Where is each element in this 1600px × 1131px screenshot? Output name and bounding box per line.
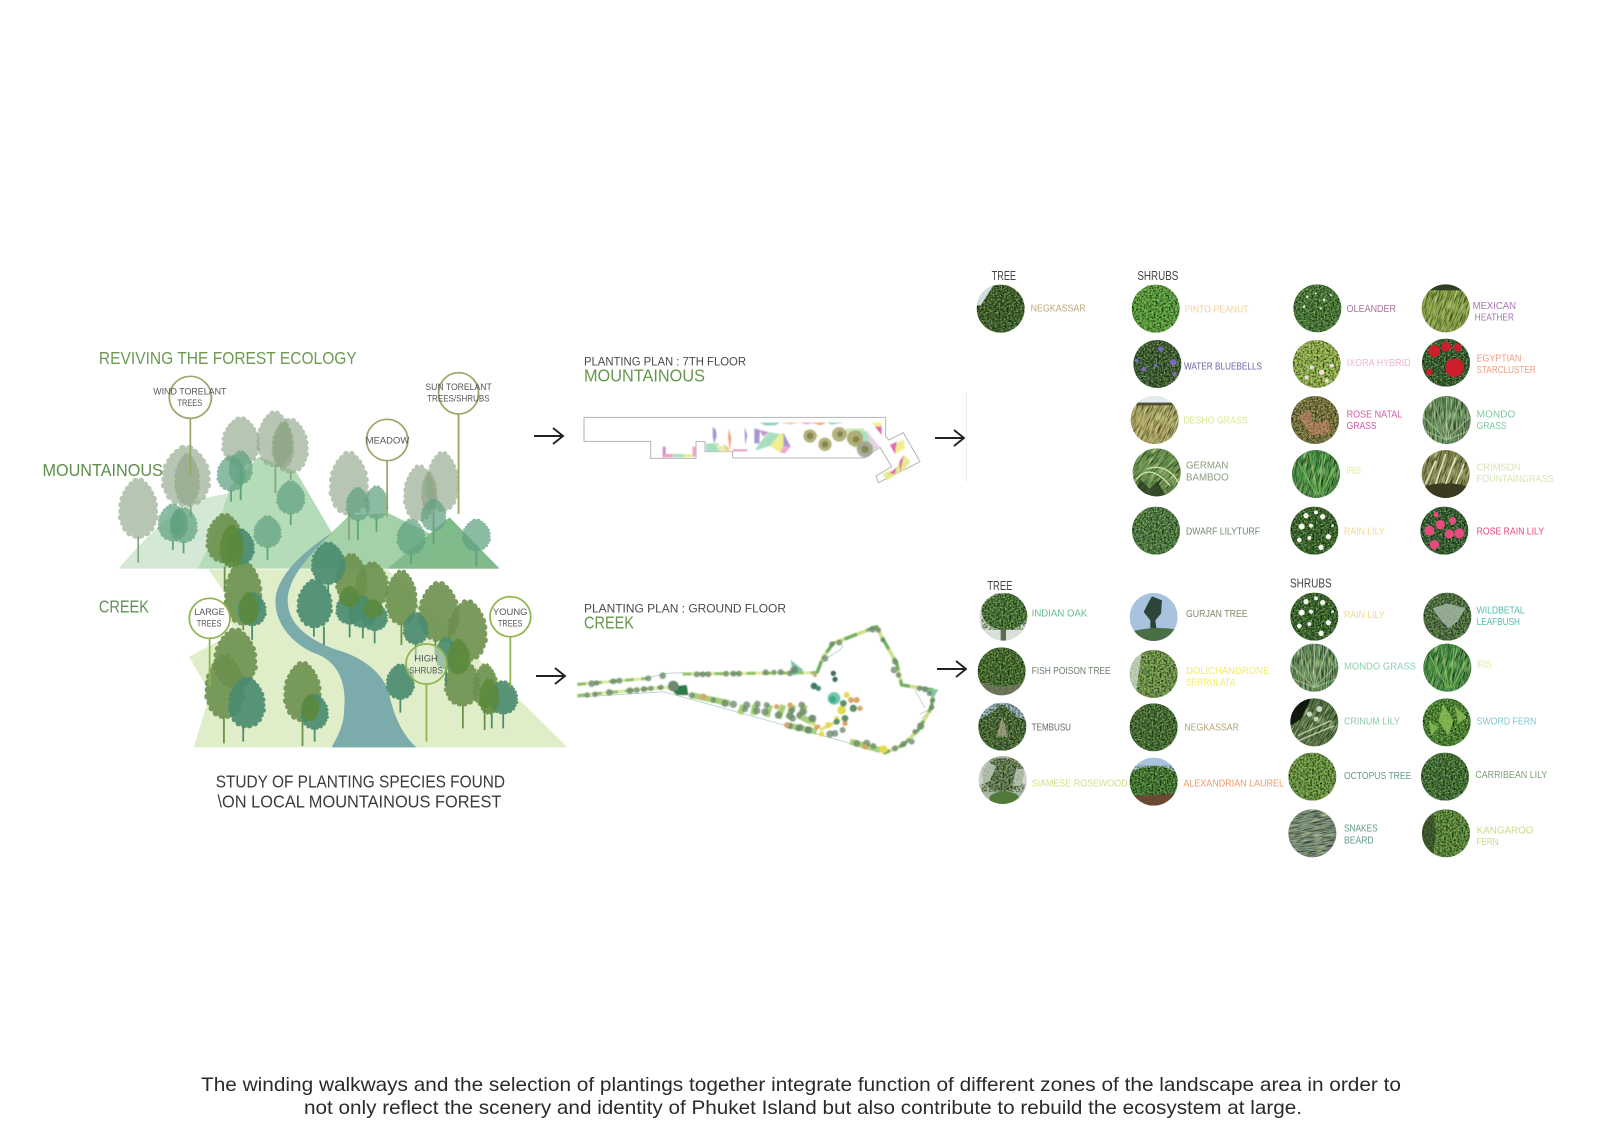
label: young trees <box>490 597 531 687</box>
trees: creek olive canopy <box>204 513 498 746</box>
species: dwarf lilyturf <box>1132 507 1260 555</box>
species: oleander <box>1293 284 1396 332</box>
plan subheading: creek: CREEK <box>584 612 634 632</box>
label: large trees <box>189 598 230 687</box>
plan outline: 7th floor <box>584 417 920 483</box>
species: rain lily: RAIN LILY <box>1344 526 1385 537</box>
species: mexican heather: MEXICAN <box>1473 301 1516 312</box>
species: mondo grass: GRASS <box>1477 421 1507 432</box>
heading: tree: TREE <box>987 579 1012 593</box>
plan subheading: mountainous: MOUNTAINOUS <box>584 366 705 386</box>
species: water bluebells <box>1133 340 1262 388</box>
mountain: far left <box>119 492 280 569</box>
species: desho grass <box>1130 396 1248 444</box>
species: rose natal grass <box>1291 396 1403 444</box>
panel: creek shrub species <box>1282 577 1547 861</box>
label: sun tolerant trees and shrubs: TREES/SHRUBS <box>427 394 490 405</box>
trees: sage mountain understory <box>157 450 491 567</box>
trees: pale grey-green mountain canopy <box>118 411 460 563</box>
species: mondo grass: MONDO GRASS <box>1344 661 1416 672</box>
trees: dark overlap highlights <box>220 525 499 721</box>
arrow: diagram to ground floor plan <box>536 668 565 684</box>
label: meadow: MEADOW <box>366 436 410 447</box>
label: sun tolerant trees and shrubs: SUN TORELANT <box>425 382 492 393</box>
arrow: ground floor plan to species <box>937 661 966 677</box>
species: crimson fountaingrass: FOUNTAINGRASS <box>1477 474 1553 485</box>
species: carribean lily <box>1421 753 1547 801</box>
species: dolichandrone serrulata <box>1130 650 1269 698</box>
species: egyptian starcluster: STARCLUSTER <box>1477 365 1536 376</box>
heading: shrubs: SHRUBS <box>1137 269 1178 283</box>
caption: study of planting species: STUDY OF PLANTING SPECIES FOUND <box>216 771 505 791</box>
label: young trees: TREES <box>498 619 522 630</box>
species: dwarf lilyturf: DWARF LILYTURF <box>1186 526 1260 537</box>
plan outline: boundary <box>577 645 932 753</box>
heading: shrubs: SHRUBS <box>1290 577 1332 591</box>
mountain: right front <box>387 517 500 569</box>
panel: creek tree species <box>978 579 1284 806</box>
species: iris: IRIS <box>1477 660 1491 671</box>
species: carribean lily: CARRIBEAN LILY <box>1475 770 1547 781</box>
label: wind tolerant trees: WIND TORELANT <box>153 387 227 397</box>
species: sword fern <box>1423 698 1536 746</box>
planting zones: coloured beds <box>663 423 911 481</box>
species: tembusu: TEMBUSU <box>1032 722 1071 733</box>
species: mexican heather: HEATHER <box>1475 312 1514 323</box>
label: large trees: LARGE <box>194 607 225 618</box>
panel: forest ecology diagram <box>42 349 567 812</box>
label: high shrubs <box>406 644 447 742</box>
species: siamese rosewood <box>979 756 1128 805</box>
species: desho grass: DESHO GRASS <box>1183 415 1248 426</box>
species: siamese rosewood: SIAMESE ROSEWOOD <box>1032 779 1128 790</box>
species: mondo grass: MONDO <box>1477 410 1515 421</box>
species: crimson fountaingrass <box>1422 450 1553 498</box>
species: rain lily <box>1290 593 1385 641</box>
trees: creek teal canopy <box>226 529 518 742</box>
label: meadow <box>366 419 410 517</box>
species: wildbetal leafbush: LEAFBUSH <box>1477 617 1520 628</box>
label: wind tolerant trees: TREES <box>177 398 202 409</box>
species: crimson fountaingrass: CRIMSON <box>1477 462 1521 473</box>
species: tembusu <box>978 703 1071 751</box>
heading: creek: CREEK <box>99 597 149 617</box>
species: egyptian starcluster <box>1422 339 1536 387</box>
species: fish poison tree <box>978 647 1111 695</box>
plan planting: feature island clusters <box>668 671 887 753</box>
heading: tree: TREE <box>992 269 1016 283</box>
infographic canvas <box>44 271 1553 1118</box>
species: iris <box>1292 450 1361 498</box>
label: high shrubs: SHRUBS <box>409 666 443 676</box>
label: wind tolerant trees <box>153 376 227 475</box>
species: iris: IRIS <box>1347 466 1361 477</box>
caption: study of planting species <box>216 771 505 812</box>
species: water bluebells: WATER BLUEBELLS <box>1184 361 1262 372</box>
species: mondo grass <box>1423 396 1515 444</box>
species: dolichandrone serrulata: DOLICHANDRONE <box>1186 666 1269 677</box>
planting zones: shrub clusters <box>803 427 873 457</box>
panel: mountainous species, right columns <box>1287 278 1553 555</box>
species: negkassar: NEGKASSAR <box>1184 722 1239 733</box>
species: german bamboo <box>1132 448 1228 496</box>
panel: ground floor planting plan <box>577 601 938 753</box>
species: rose rain lily <box>1420 507 1544 555</box>
arrow: diagram to 7th floor plan <box>534 428 563 444</box>
species: snakes beard: SNAKES <box>1344 824 1378 835</box>
species: pinto peanut: PINTO PEANUT <box>1185 305 1249 316</box>
species: rain lily: RAIN LILY <box>1344 610 1385 621</box>
footer description: not only reflect the scenery and identity of Phuket Island but also contribute to rebuild the ecosystem at large. <box>304 1097 1302 1119</box>
species: negkassar: NEGKASSAR <box>1031 303 1086 314</box>
species: snakes beard: BEARD <box>1344 835 1374 846</box>
divider: faint vertical <box>966 392 968 482</box>
mountain: centre <box>198 457 387 569</box>
creek ground <box>189 569 567 747</box>
mountain: right <box>294 513 500 569</box>
species: ixora hybrid: IXORA HYBRID <box>1347 358 1411 369</box>
species: crinum lily <box>1290 698 1400 746</box>
heading: reviving the forest ecology: REVIVING THE FOREST ECOLOGY <box>99 349 357 368</box>
label: sun tolerant trees and shrubs <box>425 373 492 514</box>
species: sword fern: SWORD FERN <box>1477 716 1536 727</box>
species: pinto peanut <box>1132 285 1249 333</box>
species: rose rain lily: ROSE RAIN LILY <box>1477 526 1544 537</box>
species: crinum lily: CRINUM LILY <box>1344 716 1400 727</box>
species: alexandrian laurel <box>1130 758 1284 806</box>
species: kangaroo fern <box>1422 809 1533 857</box>
species: octopus tree <box>1288 753 1411 801</box>
species: indian oak: INDIAN OAK <box>1032 609 1087 620</box>
species: gurjan tree <box>1130 593 1248 641</box>
species: kangaroo fern: KANGAROO <box>1477 825 1533 836</box>
label: young trees: YOUNG <box>493 607 527 618</box>
species: gurjan tree: GURJAN TREE <box>1186 609 1248 620</box>
plan planting: boundary strips <box>577 627 938 753</box>
plan heading: 7th floor: PLANTING PLAN : 7TH FLOOR <box>584 354 746 368</box>
species: mondo grass <box>1290 644 1416 692</box>
species: indian oak <box>979 593 1087 641</box>
footer description <box>201 1074 1401 1119</box>
species: oleander: OLEANDER <box>1347 304 1396 315</box>
species: iris <box>1423 644 1491 692</box>
species: rose natal grass: GRASS <box>1347 421 1377 432</box>
species: octopus tree: OCTOPUS TREE <box>1344 771 1411 782</box>
footer description: The winding walkways and the selection of plantings together integrate function of different zones of the landscape area in order to <box>201 1074 1401 1096</box>
species: dolichandrone serrulata: SERRULATA <box>1186 677 1235 688</box>
panel: 7th floor planting plan <box>584 354 920 483</box>
species: negkassar <box>1130 703 1239 751</box>
caption: study of planting species: \ON LOCAL MOUNTAINOUS FOREST <box>217 791 501 812</box>
species: snakes beard <box>1288 809 1378 858</box>
label: large trees: TREES <box>197 619 221 630</box>
arrow: 7th floor plan to species <box>935 430 964 446</box>
species: wildbetal leafbush <box>1423 593 1525 641</box>
species: fish poison tree: FISH POISON TREE <box>1032 666 1111 677</box>
plan planting: grey-green tree dots <box>585 626 935 751</box>
species: rose natal grass: ROSE NATAL <box>1347 409 1403 420</box>
species: alexandrian laurel: ALEXANDRIAN LAUREL <box>1183 779 1284 790</box>
species: kangaroo fern: FERN <box>1477 837 1498 848</box>
label: high shrubs: HIGH <box>414 654 438 665</box>
species: wildbetal leafbush: WILDBETAL <box>1477 606 1525 617</box>
species: german bamboo: GERMAN <box>1186 461 1228 472</box>
species: mexican heather <box>1422 284 1516 332</box>
heading: mountainous: MOUNTAINOUS <box>42 461 163 480</box>
species: german bamboo: BAMBOO <box>1186 472 1229 483</box>
species: egyptian starcluster: EGYPTIAN <box>1477 354 1521 365</box>
species: rain lily <box>1290 507 1385 555</box>
plan heading: ground floor: PLANTING PLAN : GROUND FLOOR <box>584 601 786 615</box>
species: negkassar <box>977 285 1086 333</box>
creek river <box>275 533 416 747</box>
panel: mountainous species, trees and shrubs column <box>977 269 1262 555</box>
species: ixora hybrid <box>1293 340 1411 388</box>
